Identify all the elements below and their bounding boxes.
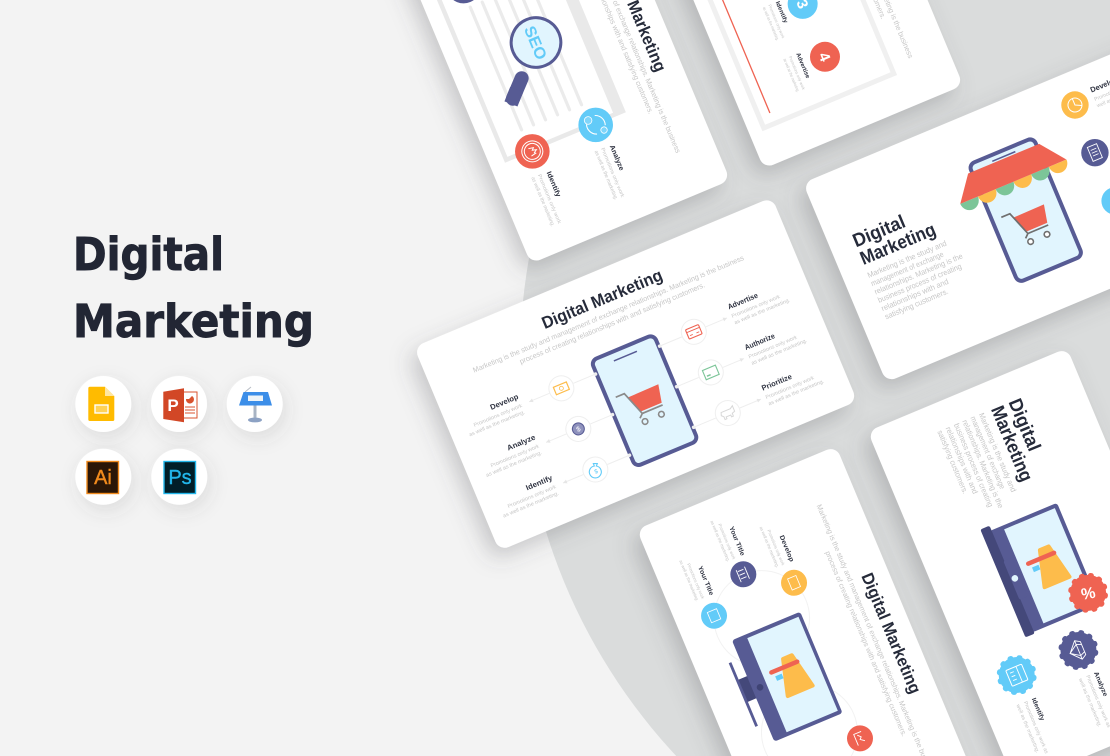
tablet [980,498,1100,637]
step: Your Title (purple): as well as the marketing. [709,520,731,562]
document text stripes [470,0,582,130]
icon: blue circle [1097,183,1110,219]
icon: Photoshop [151,449,207,505]
red timeline [656,0,770,113]
heading: Marketing [73,295,314,348]
step: Analyze badge: well as the marketing. [1077,678,1102,728]
icon: percent badge [1065,569,1110,616]
slide title: Marketing [986,403,1036,485]
step: Identify badge: well as the marketing. [1015,704,1040,754]
step: Your Title (blue) [677,552,731,633]
slide title: Digital Marketing [857,570,925,696]
step 4 [782,37,848,94]
slide title [850,202,939,270]
slide description: relationships with and [944,425,980,495]
step: Your Title (blue): as well as the marketing. [678,559,700,602]
label: Develop [1089,67,1110,109]
slide description: management of exchange [870,250,945,288]
step 3: Promotions only work [767,4,786,40]
slide description: Marketing is the study and management of exchange relationships. Marketing is the business [471,253,745,375]
slide title: Digital [850,212,909,252]
icon: magnifier SEO: SEO [520,24,549,63]
step: Identify: Identify [524,473,555,492]
step: Identify: $ [594,469,600,476]
background grey circle [520,0,1110,756]
step: Identify: Promotions only work [507,484,558,510]
icon: purple circle [1077,135,1110,171]
step: Authorize: as well as the marketing. [751,338,808,367]
icon: bell [768,652,813,698]
step: Authorize: Authorize [743,331,776,352]
step: Develop: Promotions only work [473,403,524,429]
step: Your Title (purple) [708,512,760,591]
step 4: Advertise [794,52,810,80]
step: Analyze: Promotions only work [490,444,541,469]
slide description: management of exchange [969,415,1007,490]
slide description: relationships with and [880,277,950,313]
icon: magnifier SEO [483,10,577,104]
step: Analyze: $ [576,426,582,434]
step: Analyze: as well as the marketing. [485,450,543,479]
label: Identify: Promotions only work [536,174,562,225]
slide description: Marketing is the study and [866,239,948,280]
step: Your Title (purple): Promotions only work [717,523,737,561]
step: Your Title (blue): Promotions only work [686,563,706,600]
step 3: Identify [774,1,788,25]
step: Advertise: as well as the marketing. [734,297,791,326]
icon: Google Slides [75,376,131,432]
label: Analyze: Promotions only work [599,147,625,199]
connector lines [529,318,761,483]
step: Develop: as well as the marketing. [759,526,780,568]
step 3 [761,0,826,42]
slide title [986,396,1054,485]
step: Identify [495,452,612,521]
slide description [866,235,975,321]
icon: Photoshop: Ps [168,467,192,489]
icon: bell [1025,544,1069,590]
slide title: Digital Marketing [539,266,665,333]
step: Analyze: Analyze [506,433,537,452]
step: Identify badge: Identify [1030,697,1046,722]
chart frame [628,0,897,131]
step: Your Title (purple): Your Title [727,526,746,557]
label: Analyze: Analyze [608,144,625,172]
step: Advertise: Advertise [726,291,759,311]
phone [588,333,701,468]
slide description [935,411,1022,520]
heading: Digital [73,228,224,281]
step: Develop [757,518,811,600]
step: Develop: Promotions only work [766,529,786,567]
step: Develop: Develop [778,534,795,563]
label: Identify: Identify [545,171,562,198]
step: Develop: Develop [489,392,520,412]
icon: Analyze circle [573,102,618,148]
step: Advertise: Promotions only work [731,294,781,320]
step: Analyze [478,411,595,480]
label: Analyze [593,143,635,201]
slide title: Digital [1004,396,1044,455]
step: Develop [461,371,578,440]
slide title: Marketing [857,219,939,270]
slide description: satisfying customers. [935,429,970,495]
icon: Identify circle [510,129,555,174]
step: Prioritize: Prioritize [760,372,793,393]
step: Identify badge [993,651,1066,756]
phone [969,138,1083,283]
step: Analyze badge: Analyze [1092,671,1109,698]
slide description: Marketing is the study and [977,411,1018,493]
step: Analyze badge [1055,626,1110,734]
step: Identify badge: Promotions only work as [1022,701,1049,755]
icon: Illustrator: Ai [94,467,112,489]
heading [73,228,314,348]
slide description: relationships. Marketing is the [873,251,964,296]
step: Prioritize: Promotions only work [765,375,815,401]
icon: Develop circle [1057,87,1093,123]
step 4: 4 [815,50,834,65]
step: Identify: as well as the marketing. [502,491,560,519]
slide description: satisfying customers. [883,287,950,321]
label: Analyze: as well as the marketing. [593,150,619,201]
icon: shopping cart [1001,200,1056,251]
icon: percent badge: % [1080,585,1097,604]
monitor [721,612,843,746]
step 4: Promotions only work [788,55,807,91]
step: Develop: as well as the marketing. [468,410,526,438]
slide description: process of creating relationships with and satisfying customers. [518,280,706,366]
icon: purple step circle [441,0,486,9]
step: Authorize: Promotions only work [748,335,798,360]
label: Identify: as well as the marketing. [529,176,555,227]
icon: Keynote [227,376,283,432]
icon: shopping cart [616,380,671,431]
slide description: relationships. Marketing is the [960,418,1005,510]
slide description: business process of creating [952,422,995,508]
step: Prioritize [711,361,826,429]
slide description: business process of creating [876,262,963,305]
panel: tablet slide [868,348,1110,756]
step: Prioritize: as well as the marketing. [768,379,825,407]
step: red circle [843,721,891,756]
step: Your Title (blue): Your Title [696,565,715,597]
panel: monitor slide [637,446,984,756]
slide description: process of creating relationships with and satisfying customers. [823,550,909,738]
document frame [397,0,626,163]
step: Advertise [677,280,792,348]
connector rings [699,556,872,756]
step 3: as well as the marketing. [762,6,780,41]
step: Authorize [694,321,809,389]
awning [951,136,1070,213]
label: Identify [529,170,571,228]
icon: PowerPoint [151,376,207,432]
step 4: as well as the marketing. [782,58,801,93]
icon: Illustrator [75,449,131,505]
icon: PowerPoint: P [167,396,179,415]
panel: numbered steps slide [616,0,963,169]
panel: main slide [414,197,857,551]
panel: shop slide [803,35,1110,382]
panel: SEO slide [383,0,730,264]
